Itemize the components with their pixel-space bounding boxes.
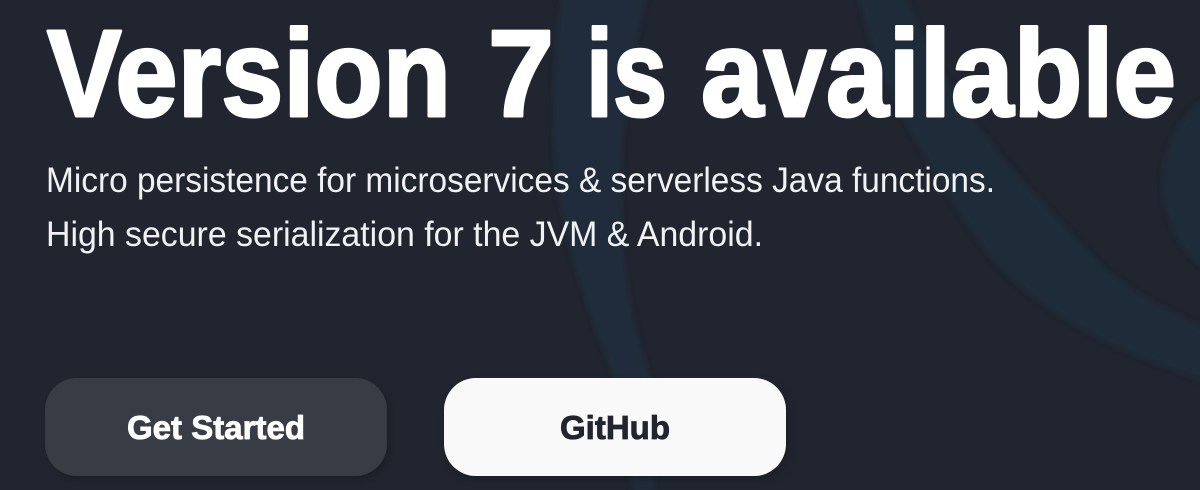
title: [47, 6, 1176, 143]
button: Get Started: Get Started: [127, 409, 305, 446]
title: is: [586, 6, 667, 143]
button: GitHub: GitHub: [560, 409, 670, 446]
description line 1: Micro persistence for microservices & serverless Java functions.: [46, 161, 995, 200]
title: 7: [488, 6, 554, 143]
button: Get Started: [45, 378, 387, 476]
description text: [46, 161, 995, 254]
background arcs: [554, 0, 1200, 490]
button: GitHub: [444, 378, 786, 476]
title: Version: [47, 6, 451, 143]
description line 2: High secure serialization for the JVM & Android.: [46, 215, 763, 254]
